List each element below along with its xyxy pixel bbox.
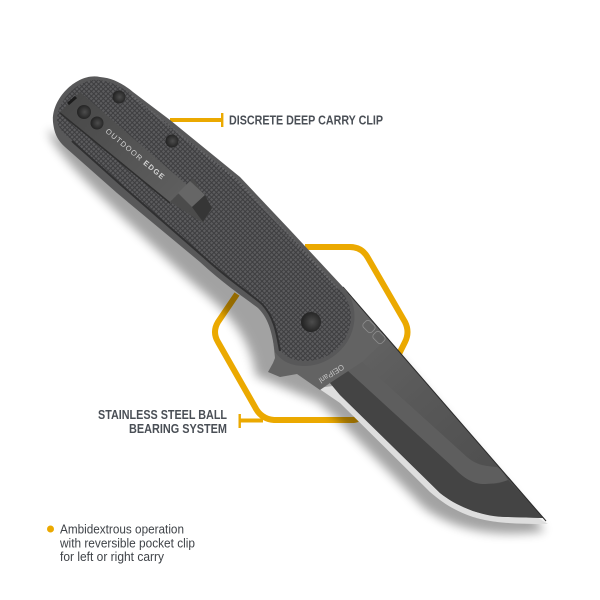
label: stainless steel ball bearing system: STAINLESS STEEL BALL xyxy=(98,407,227,422)
blade stamps xyxy=(362,319,386,345)
callout connector: deep carry clip xyxy=(170,113,223,127)
callout connector: ball bearing xyxy=(238,414,263,428)
blade steel marking: OEIPanl xyxy=(317,362,346,385)
label: discrete deep carry clip: DISCRETE DEEP CARRY CLIP xyxy=(229,112,383,128)
clip logo text: OUTDOOR EDGE xyxy=(104,127,166,181)
hexagon outline: ball bearing callout xyxy=(215,247,408,420)
blade grind band xyxy=(347,362,508,484)
label: stainless steel ball bearing system xyxy=(98,407,227,436)
pocket clip xyxy=(60,92,212,223)
bullet text: ambidextrous operation: with reversible pocket clip xyxy=(59,536,195,550)
bullet text: ambidextrous operation xyxy=(59,522,195,564)
bullet text: ambidextrous operation: for left or right carry xyxy=(60,550,165,564)
handle top highlight xyxy=(132,96,338,289)
screws xyxy=(77,90,321,332)
blade xyxy=(300,287,548,524)
bullet text: ambidextrous operation: Ambidextrous operation xyxy=(60,522,184,536)
handle lower edge xyxy=(72,141,280,351)
pivot plate and flipper xyxy=(268,285,380,390)
label: stainless steel ball bearing system: BEARING SYSTEM xyxy=(129,421,227,436)
knife xyxy=(53,76,548,524)
handle liner xyxy=(53,76,355,366)
handle scale texture xyxy=(57,80,351,361)
bullet marker xyxy=(47,526,54,532)
knife shadow xyxy=(48,130,545,534)
